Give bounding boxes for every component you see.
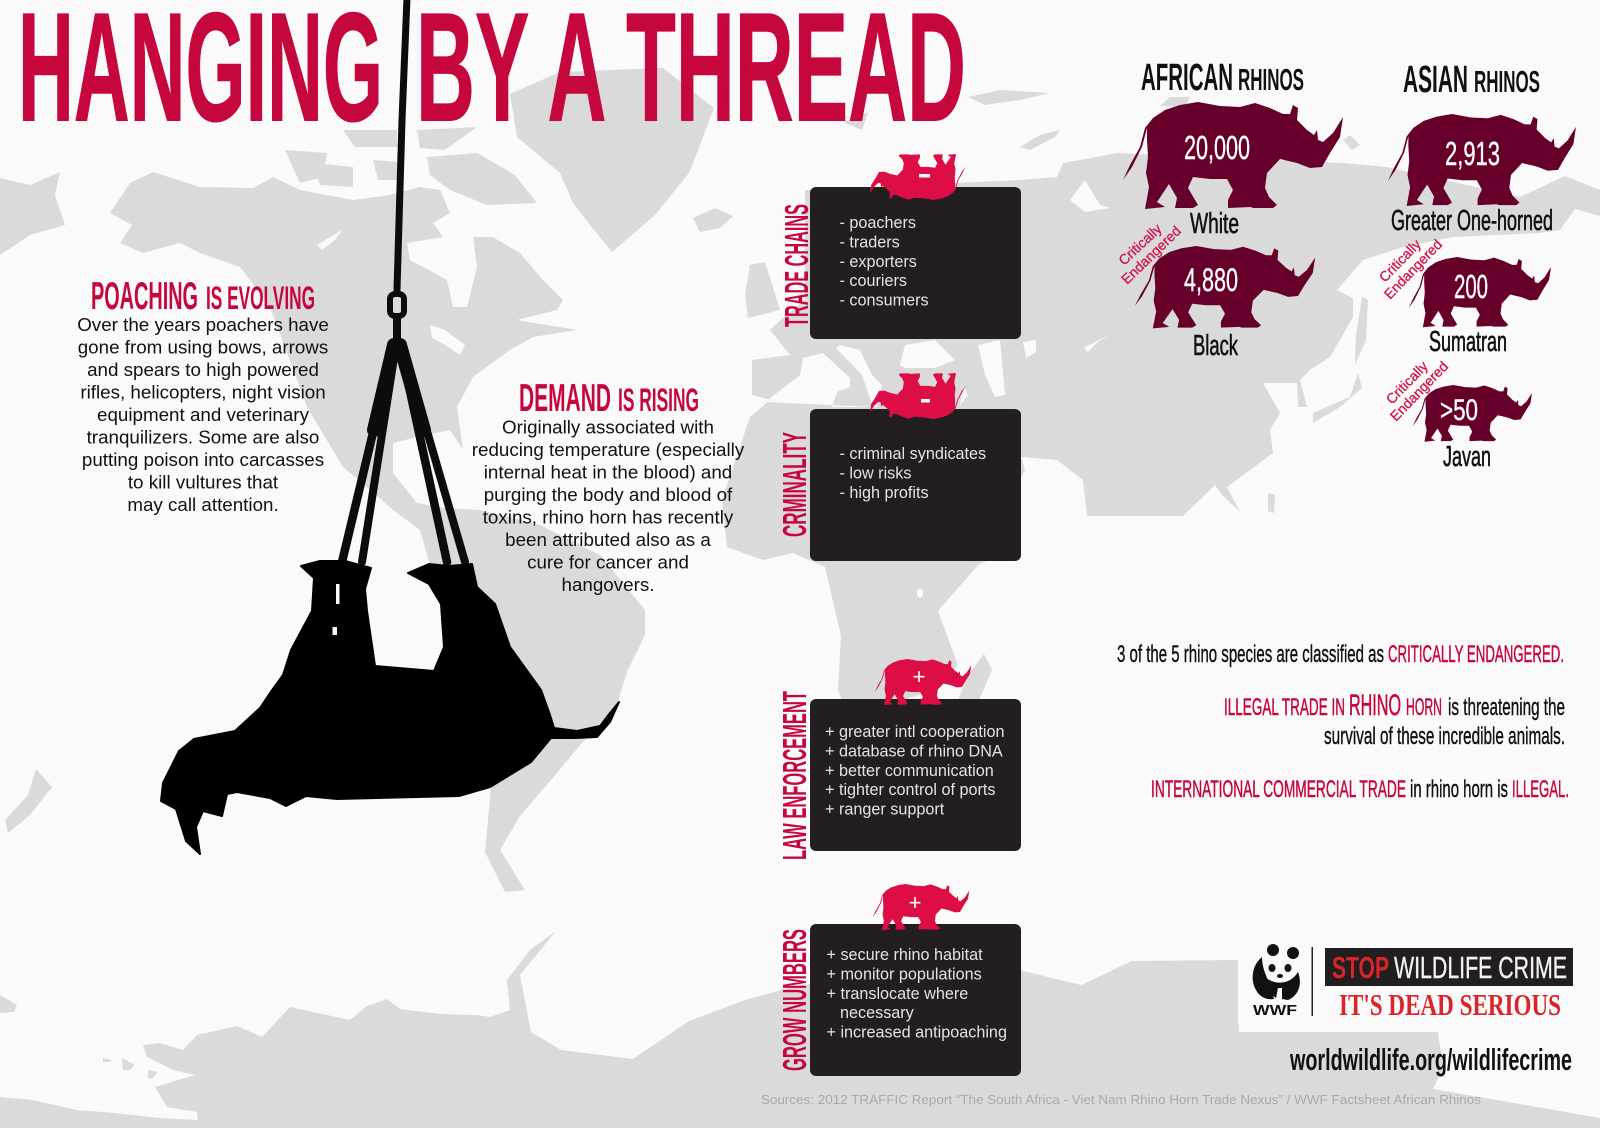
seas cut into the map <box>317 180 1110 598</box>
text block: demand: DEMAND <box>519 377 611 420</box>
species: javan rhino <box>1383 358 1532 473</box>
text block: demand: Originally associated with <box>502 416 714 438</box>
species: greater one-horned rhino: 2,913 <box>1445 135 1500 172</box>
panel: criminality: - low risks <box>840 464 911 482</box>
icon: wwf panda <box>1253 944 1300 1000</box>
panel: grow numbers: + monitor populations <box>826 965 982 983</box>
text block: demand: reducing temperature (especially <box>472 439 745 460</box>
text block: demand: toxins, rhino horn has recently <box>483 506 734 528</box>
text block: demand: cure for cancer and <box>527 552 689 572</box>
panel: law enforcement: + ranger support <box>825 801 945 819</box>
panel: law enforcement: + tighter control of ports <box>825 781 996 799</box>
species: javan rhino: >50 <box>1440 394 1478 427</box>
text block: poaching: equipment and veterinary <box>97 404 310 425</box>
species: sumatran rhino: Sumatran <box>1429 326 1507 358</box>
text block: poaching: tranquilizers. Some are also <box>87 427 319 448</box>
text block: demand: hangovers. <box>562 574 654 595</box>
panel: criminality <box>776 373 1021 561</box>
species: sumatran rhino: Critically <box>1376 236 1424 285</box>
text block: poaching: putting poison into carcasses <box>82 449 324 470</box>
text block: poaching: rifles, helicopters, night vision <box>80 382 326 403</box>
panel: law enforcement: + database of rhino DNA <box>825 742 1003 760</box>
panel: law enforcement <box>776 659 1021 860</box>
panel: law enforcement: + better communication <box>825 762 994 780</box>
species: black rhino: Endangered <box>1118 223 1184 287</box>
statement: international trade: in rhino horn is <box>1410 776 1508 803</box>
sources: Sources: 2012 TRAFFIC Report “The South Africa - Viet Nam Rhino Horn Trade Nexus” / WWF Factsheet African Rhinos <box>761 1092 1482 1107</box>
statement: illegal trade: RHINO <box>1349 689 1401 722</box>
panel: trade chains: - traders <box>840 233 900 251</box>
species: black rhino <box>1115 220 1315 362</box>
panel: criminality: CRMINALITY <box>776 432 813 537</box>
text block: poaching: Over the years poachers have <box>77 314 329 335</box>
panel: trade chains: - exporters <box>840 253 917 271</box>
species: sumatran rhino: 200 <box>1454 268 1488 305</box>
panel: grow numbers: + <box>909 890 921 915</box>
panel: trade chains: - couriers <box>840 272 907 290</box>
species: black rhino: Critically <box>1115 220 1165 268</box>
text block: poaching <box>77 275 329 515</box>
text block: poaching: to kill vultures that <box>128 472 279 493</box>
species: white rhino <box>1123 102 1343 240</box>
panel: criminality: - high profits <box>840 484 929 502</box>
text block: demand: purging the body and blood of <box>484 484 733 505</box>
heading: asian rhinos: RHINOS <box>1474 64 1540 99</box>
text block: demand: internal heat in the blood) and <box>484 462 732 482</box>
logo panel: wwf stop wildlife crime: STOP <box>1332 950 1389 985</box>
species: black rhino: 4,880 <box>1184 262 1238 298</box>
text block: demand <box>472 377 745 595</box>
panel: grow numbers: + increased antipoaching <box>826 1024 1007 1042</box>
species: white rhino: White <box>1190 208 1239 240</box>
heading: african rhinos: RHINOS <box>1238 62 1304 97</box>
text block: poaching: may call attention. <box>127 494 279 515</box>
heading: asian rhinos: ASIAN <box>1403 59 1468 101</box>
hanging rhino silhouette <box>161 561 619 854</box>
text block: poaching: gone from using bows, arrows <box>78 337 328 358</box>
statement: illegal trade <box>1224 689 1565 750</box>
statement: international trade: INTERNATIONAL COMMERCIAL TRADE <box>1151 776 1406 803</box>
species: javan rhino: Javan <box>1443 441 1491 473</box>
panel: trade chains: - poachers <box>840 214 916 232</box>
panel: law enforcement: + <box>913 664 925 689</box>
species: sumatran rhino: Endangered <box>1381 236 1445 302</box>
panel: law enforcement: + greater intl cooperation <box>825 723 1005 741</box>
statement: illegal trade: ILLEGAL TRADE IN <box>1224 694 1345 721</box>
panel: criminality: - criminal syndicates <box>840 445 986 463</box>
text block: poaching: IS EVOLVING <box>206 280 315 316</box>
panel: trade chains <box>778 154 1021 339</box>
species: black rhino: Black <box>1193 330 1238 362</box>
statement: illegal trade: HORN <box>1406 694 1442 721</box>
species: greater one-horned rhino <box>1388 114 1576 237</box>
panel: grow numbers <box>776 884 1021 1076</box>
species: javan rhino: Critically <box>1383 358 1431 407</box>
logo panel: wwf stop wildlife crime <box>1238 944 1600 1032</box>
panel: law enforcement: LAW ENFORCEMENT <box>776 691 813 860</box>
panel: grow numbers: + translocate where <box>826 985 968 1003</box>
text block: demand: been attributed also as a <box>505 529 711 550</box>
species: white rhino: 20,000 <box>1184 129 1250 166</box>
text block: poaching: POACHING <box>91 275 198 318</box>
logo panel: wwf stop wildlife crime: WWF <box>1253 1002 1297 1019</box>
panel: grow numbers: necessary <box>840 1004 915 1022</box>
species: javan rhino: Endangered <box>1387 358 1451 424</box>
panel: grow numbers: GROW NUMBERS <box>776 929 813 1071</box>
panel: trade chains: - consumers <box>840 292 929 310</box>
panel: trade chains: TRADE CHAINS <box>778 204 815 327</box>
heading: african rhinos: AFRICAN <box>1141 57 1233 99</box>
text block: demand: IS RISING <box>618 382 699 418</box>
text block: poaching: and spears to high powered <box>87 359 319 380</box>
panel: grow numbers: + secure rhino habitat <box>826 946 983 964</box>
statement: critically endangered: 3 of the 5 rhino species are classified as <box>1117 641 1384 668</box>
hanging rope and sling <box>342 0 465 562</box>
species: sumatran rhino <box>1376 236 1551 358</box>
